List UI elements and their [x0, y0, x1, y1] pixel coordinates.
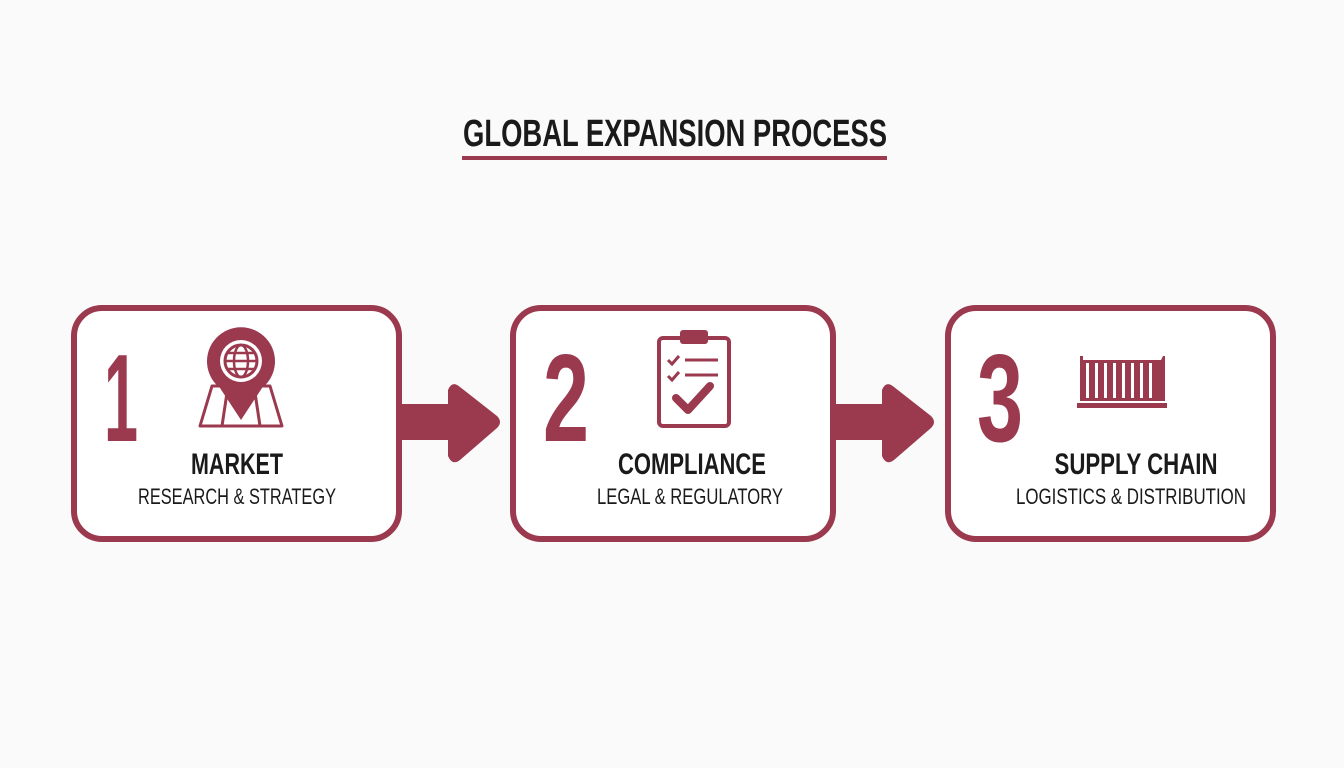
icon: clipboard — [659, 330, 729, 426]
number 2: 2 — [543, 330, 589, 468]
arrow: step 2 to 3 — [832, 384, 934, 462]
sublabel: RESEARCH & STRATEGY — [138, 484, 336, 509]
label: supply chain: SUPPLY CHAIN — [1054, 448, 1218, 481]
panel: market: 1 — [104, 330, 138, 468]
icon: globe pin on map — [200, 327, 282, 426]
panel: market — [74, 308, 399, 539]
sublabel: LEGAL & REGULATORY — [597, 484, 783, 509]
title — [462, 113, 887, 160]
arrow: step 1 to 2 — [398, 384, 500, 462]
panel: compliance — [513, 308, 833, 539]
label: compliance: COMPLIANCE — [618, 448, 766, 481]
icon: shipping container — [1077, 356, 1167, 408]
panel: supply chain — [948, 308, 1273, 539]
sublabel: LOGISTICS & DISTRIBUTION — [1016, 484, 1246, 509]
title: GLOBAL EXPANSION PROCESS — [463, 113, 887, 155]
number 3: 3 — [977, 330, 1023, 468]
label: market: MARKET — [191, 448, 283, 481]
